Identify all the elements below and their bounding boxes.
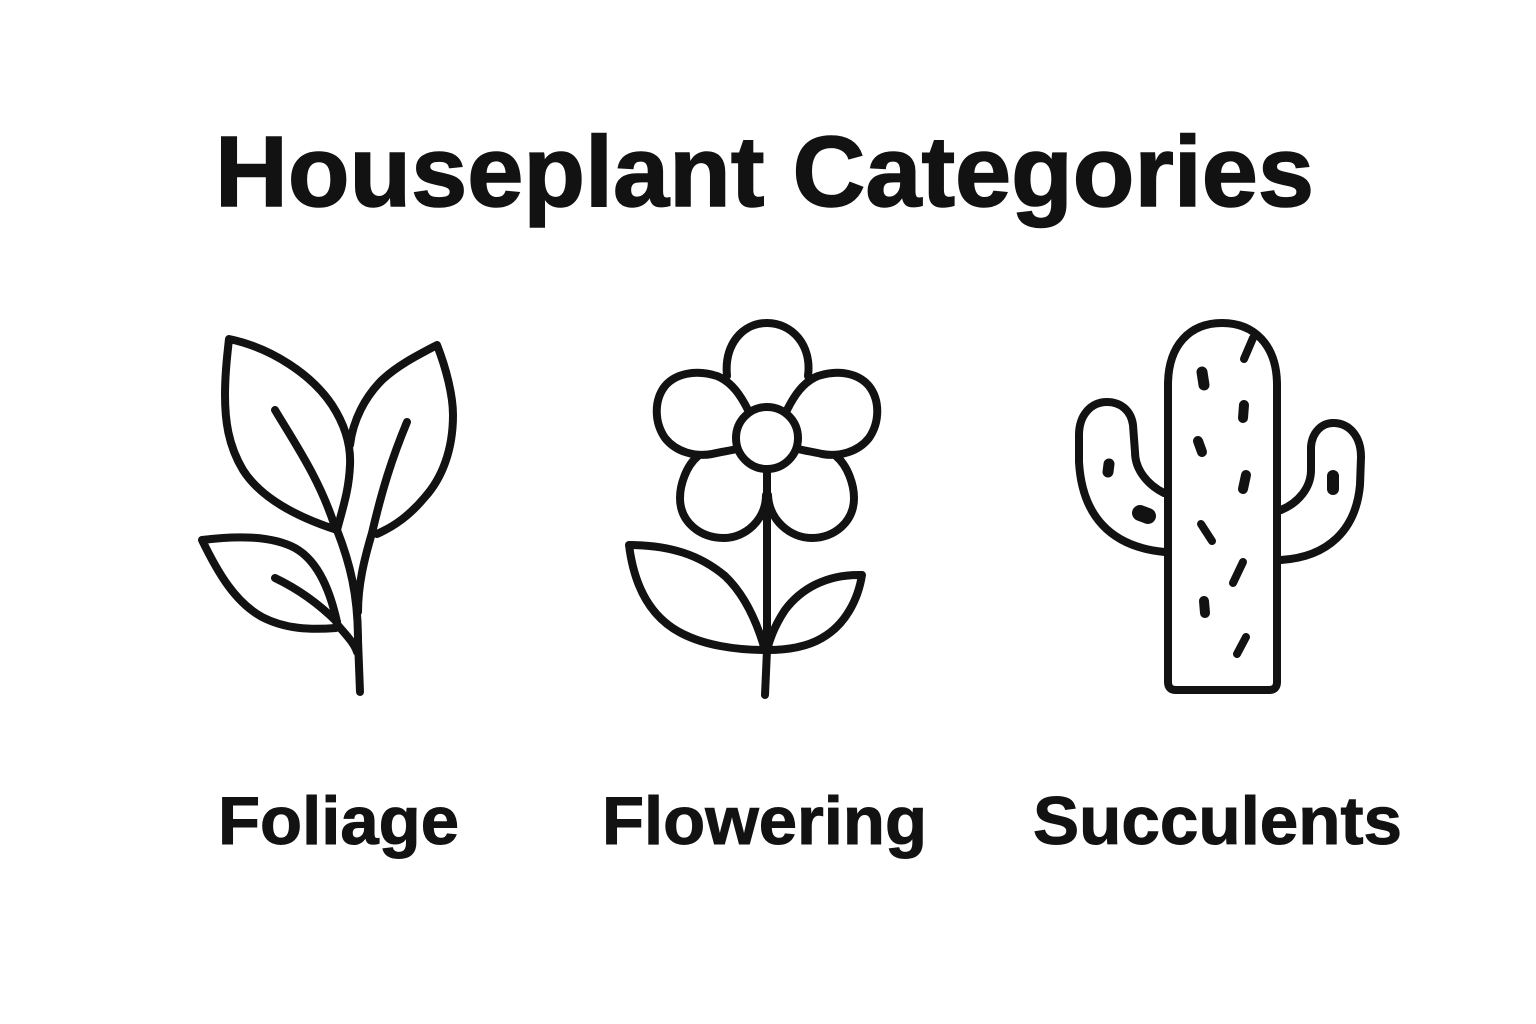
flower stem [765,473,767,695]
label: foliage: Foliage [218,783,459,859]
right leaf [350,345,453,534]
top spine [1244,338,1253,359]
spines [1108,372,1333,654]
lower leaf vein [275,578,337,622]
lower left petal [680,456,766,538]
left arm [1079,402,1165,552]
upper left petal [657,373,748,455]
icon: foliage leaves [202,339,453,692]
title: Houseplant Categories [215,116,1314,228]
left leaf vein [275,410,335,527]
icon: flower [629,323,877,695]
lower right petal [768,456,854,538]
label: succulents: Succulents [1033,783,1402,859]
cactus body [1168,323,1277,690]
right leaf [767,575,862,650]
flower centre [736,407,798,469]
upper right petal [787,373,877,455]
label: flowering: Flowering [602,783,927,859]
left leaf [629,545,765,650]
icon: cactus [1079,323,1361,690]
right leaf vein and stem side [358,422,407,612]
top petal [727,323,809,376]
main stem [337,530,360,692]
lower leaf [202,537,337,629]
right arm [1281,423,1361,560]
left leaf [225,339,350,530]
stem branch [337,624,357,652]
